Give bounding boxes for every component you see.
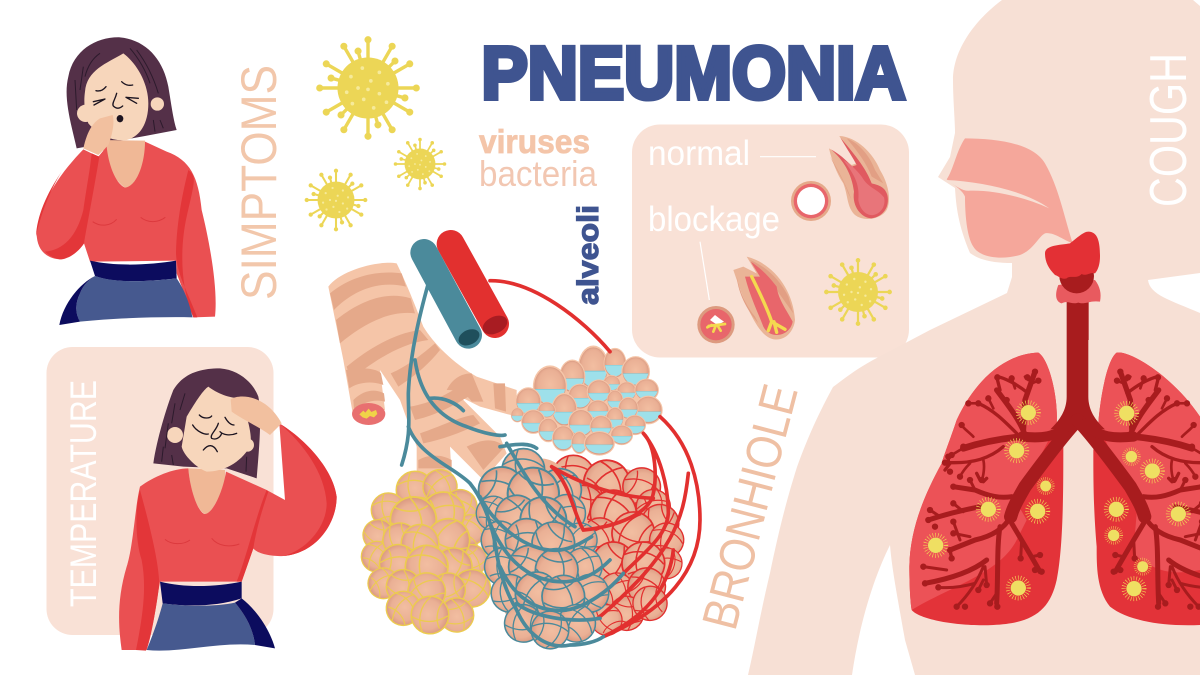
icon: virus in panel <box>826 260 890 324</box>
red arterial capillaries <box>490 281 700 637</box>
diagram: alveoli and bronchiole <box>328 244 700 654</box>
panel: temperature background <box>46 347 274 635</box>
blocked airway section <box>733 257 795 340</box>
larynx and upper trachea <box>1045 232 1101 340</box>
icon: small virus left <box>307 171 365 229</box>
trachea <box>1050 340 1105 429</box>
head airway: nasal and oral cavity <box>947 138 1073 258</box>
icon: large virus <box>320 40 416 136</box>
label: normal: normal <box>648 134 750 173</box>
line: blockage pointer <box>700 242 709 300</box>
blue capillary alveoli <box>470 449 616 654</box>
panel details: bronchus illustrations <box>697 136 889 343</box>
right lung <box>1093 352 1200 625</box>
bronchial tree left <box>923 372 1078 607</box>
label: temperature: TEMPERATURE <box>63 380 104 607</box>
lungs with trachea and bronchial tree <box>909 340 1200 625</box>
sweater shadows <box>136 423 337 651</box>
sweater shadows <box>36 153 197 317</box>
body silhouette with head and torso <box>748 0 1200 675</box>
title: PNEUMONIA <box>482 32 906 114</box>
sweater <box>119 423 337 650</box>
waistband <box>90 261 177 281</box>
hand <box>83 115 113 155</box>
yellow alveoli cluster <box>355 463 498 637</box>
label: cough: COUGH <box>1140 53 1198 207</box>
viruses in lungs <box>925 402 1189 599</box>
label: blockage: blockage <box>648 200 780 239</box>
normal airway cross section <box>791 181 831 221</box>
label: bacteria: bacteria <box>479 153 598 194</box>
figure: coughing woman <box>36 37 216 325</box>
hair <box>153 368 260 478</box>
hand on forehead <box>231 397 282 435</box>
water filled alveoli <box>511 345 663 456</box>
blue venous capillaries <box>402 283 623 646</box>
bronchiole cut end <box>352 403 385 425</box>
label: viruses: viruses <box>479 123 590 160</box>
sweater <box>37 142 216 317</box>
skirt <box>76 276 193 322</box>
left lung <box>909 353 1063 625</box>
red capillary alveoli <box>552 452 689 641</box>
blue vessel <box>424 253 482 349</box>
line: normal pointer <box>760 155 816 158</box>
waistband <box>160 582 242 605</box>
bronchial tubes <box>328 263 517 480</box>
panel: normal vs blockage <box>632 124 909 358</box>
label: alveoli: alveoli <box>572 205 605 305</box>
icon: medium virus <box>396 140 444 188</box>
hair <box>67 37 177 148</box>
face <box>162 387 254 514</box>
blocked airway cross section <box>697 306 735 343</box>
bronchial tree right <box>1078 372 1200 607</box>
figure: woman with fever <box>119 368 337 651</box>
red vessel <box>451 244 510 338</box>
label: simptoms: SIMPTOMS <box>231 65 287 300</box>
normal airway section <box>829 136 889 219</box>
skirt <box>147 603 255 651</box>
label: bronhiole: BRONHIOLE <box>691 379 809 635</box>
face <box>75 48 164 188</box>
